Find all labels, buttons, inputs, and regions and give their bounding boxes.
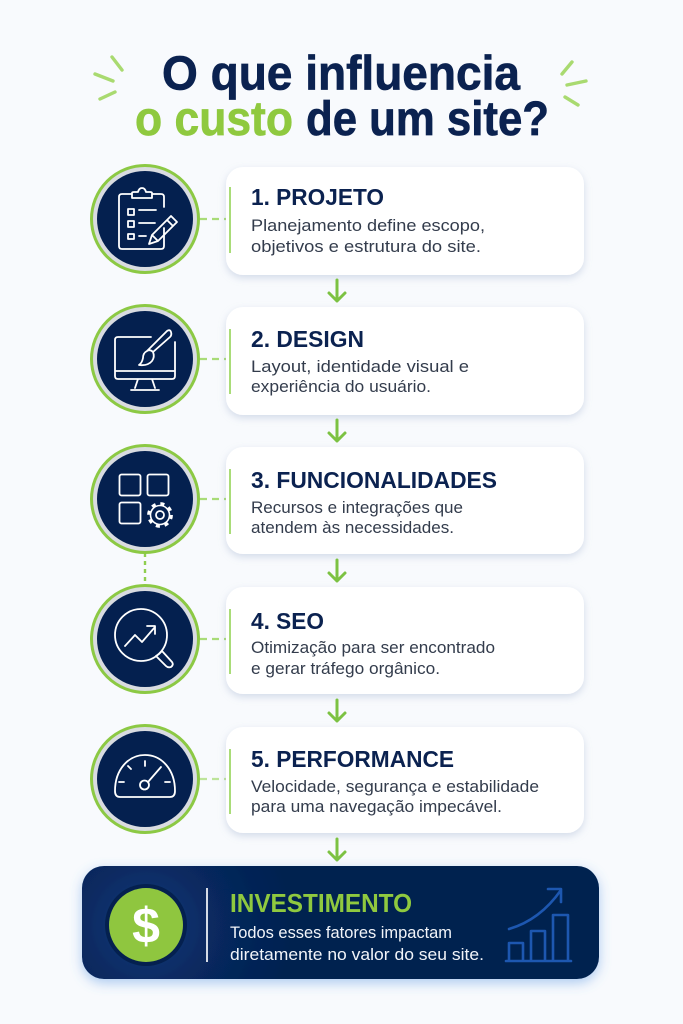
card [226, 167, 584, 275]
card: atendem às necessidades. [251, 519, 454, 537]
icon: dollar coin [105, 884, 187, 966]
connector [200, 498, 228, 500]
circle badge with grid and gear icon [92, 446, 198, 552]
card [226, 307, 584, 415]
card: Recursos e integrações que [251, 499, 463, 517]
connector [200, 358, 228, 360]
arrow [329, 280, 345, 301]
step 1: projeto [92, 166, 584, 275]
step 3: funcionalidades [92, 446, 584, 554]
divider [206, 888, 208, 962]
card: Planejamento define escopo, [251, 217, 485, 235]
title [135, 48, 549, 146]
title: de um site? [306, 93, 549, 146]
icon: dollar coin: $ [132, 898, 160, 954]
card: para uma navegação impecável. [251, 798, 502, 816]
title: o custo [135, 93, 293, 146]
card: 5. PERFORMANCE [251, 746, 454, 772]
step 2: design [92, 306, 584, 415]
card: Otimização para ser encontrado [251, 639, 495, 657]
icon: left sparks [95, 57, 122, 99]
description: Todos esses fatores impactam [230, 924, 452, 942]
card: experiência do usuário. [251, 378, 431, 396]
step 4: seo [92, 586, 584, 694]
card: 4. SEO [251, 608, 324, 634]
card: objetivos e estrutura do site. [251, 238, 481, 256]
description: diretamente no valor do seu site. [230, 946, 484, 964]
arrow [329, 420, 345, 441]
heading: INVESTIMENTO [230, 888, 412, 918]
card [226, 727, 584, 833]
card [226, 447, 584, 554]
arrow [329, 700, 345, 721]
connector [200, 218, 228, 220]
circle badge with magnifier icon [92, 586, 198, 692]
icon: right sparks [562, 62, 586, 105]
card: 2. DESIGN [251, 326, 364, 352]
card: e gerar tráfego orgânico. [251, 660, 440, 678]
panel: investimento [82, 866, 599, 979]
card [226, 587, 584, 694]
title: O que influencia [162, 48, 520, 100]
card: 1. PROJETO [251, 184, 384, 210]
circle badge with gauge icon [92, 726, 198, 832]
circle badge with clipboard icon [92, 166, 198, 272]
connector [200, 638, 228, 640]
arrow [329, 560, 345, 581]
icon: growth chart [506, 889, 571, 961]
arrow [329, 839, 345, 860]
card: Velocidade, segurança e estabilidade [251, 778, 539, 796]
description [230, 924, 484, 964]
card: Layout, identidade visual e [251, 358, 469, 376]
step 5: performance [92, 726, 584, 833]
circle badge with monitor icon [92, 306, 198, 412]
card: 3. FUNCIONALIDADES [251, 467, 497, 493]
connector [200, 778, 228, 780]
connector: dotted link between circles 3 and 4 [144, 553, 146, 584]
